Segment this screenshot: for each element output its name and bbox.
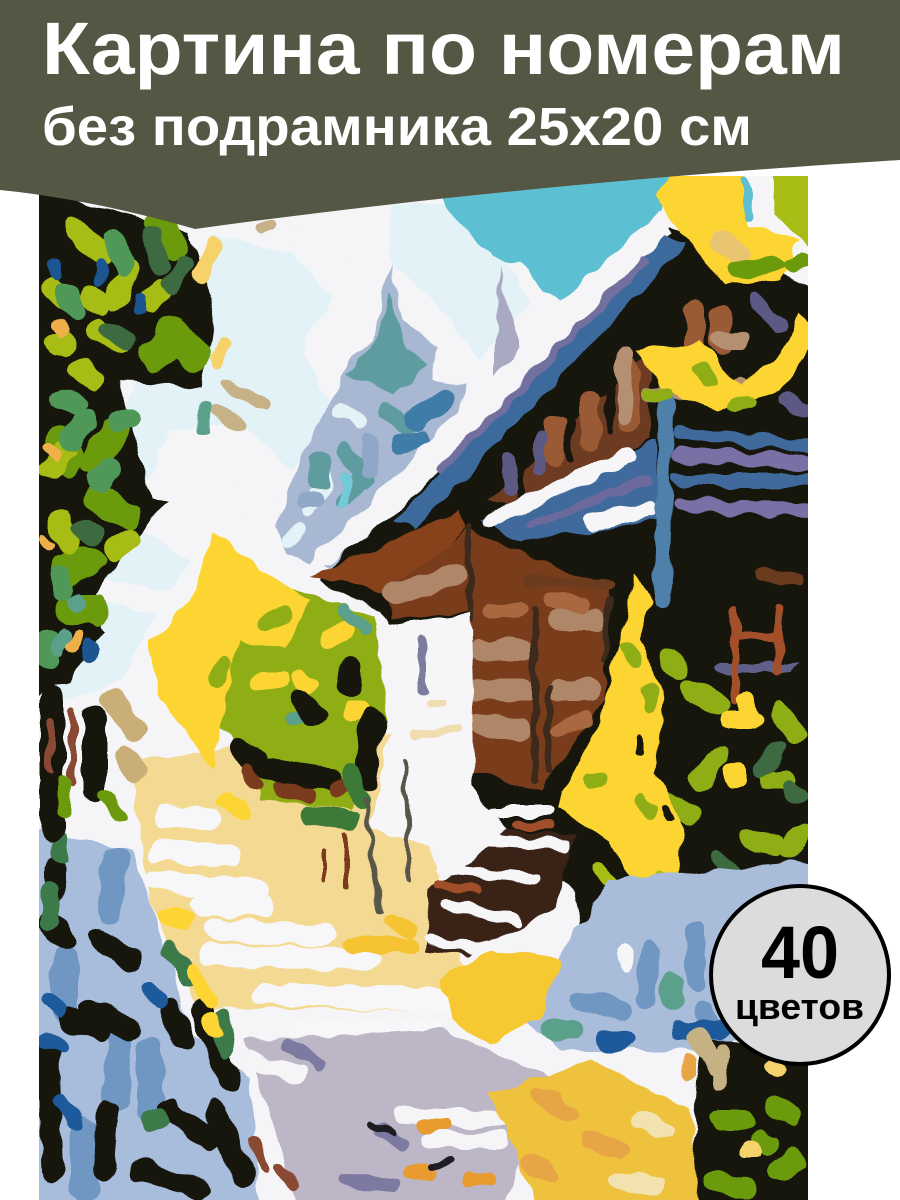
lower right flowers [440, 860, 815, 1200]
white doorway [370, 612, 475, 850]
badge: 40 colours: 40 [761, 911, 839, 994]
distant fir tree [275, 262, 522, 570]
roof with snow [296, 210, 672, 574]
log wall [680, 432, 810, 480]
sky and clouds [40, 170, 675, 700]
left foliage [30, 190, 270, 700]
eave and wooden wall [310, 510, 465, 595]
house dark body [320, 225, 815, 920]
house [296, 210, 815, 955]
central autumn bush [150, 530, 410, 910]
right climbing yellow vine [558, 574, 808, 924]
painting: wooden house in autumn [30, 170, 815, 1200]
left fence and lower-left foliage [30, 700, 295, 1200]
stairs [425, 830, 575, 955]
railing [735, 610, 778, 700]
ground and path [130, 730, 560, 1200]
title: Картина по номерам [42, 7, 845, 90]
badge: 40 colours: цветов [735, 986, 864, 1027]
header banner [0, 0, 900, 229]
badge: 40 colours [711, 886, 889, 1064]
porch post [662, 405, 666, 600]
gable wall planks [490, 350, 650, 505]
subtitle: без подрамника 25х20 см [42, 97, 752, 157]
painted scene [30, 170, 815, 1200]
top right yellow leaves [636, 172, 815, 410]
porch roof [480, 440, 658, 542]
